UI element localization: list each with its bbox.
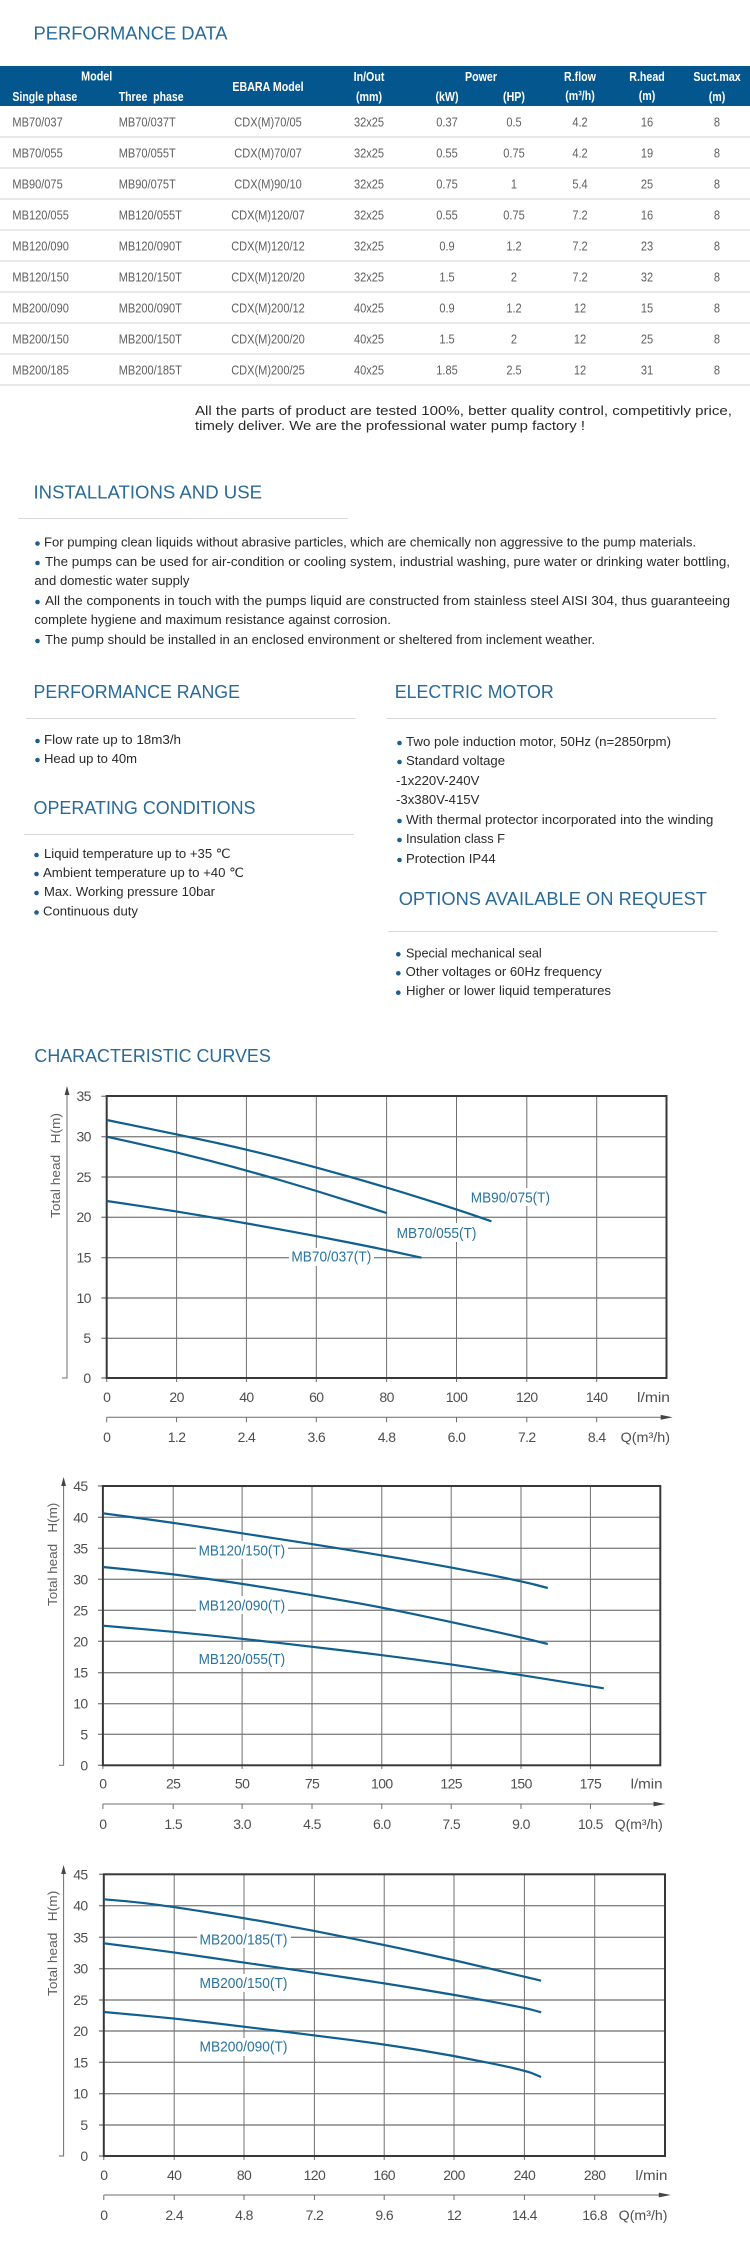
chart: MB120 curves <box>46 1477 666 1832</box>
column: suction max: 8 <box>714 177 720 192</box>
flow axis l/min values: 40 <box>239 1389 254 1405</box>
column: in/out: 32x25 <box>354 270 384 285</box>
column: in/out: 40x25 <box>354 363 384 378</box>
column: single phase: MB120/090 <box>12 239 69 254</box>
flow axis l/min values: 120 <box>304 2167 326 2183</box>
list: options available <box>396 945 612 998</box>
column: three phase: MB90/075T <box>119 177 176 192</box>
column: in/out <box>354 115 384 378</box>
column: suction max: 8 <box>714 208 720 223</box>
column: single phase: MB200/150 <box>12 332 69 347</box>
flow axis m3/h values: Q(m³/h) <box>619 2207 668 2223</box>
column: suction max: 8 <box>714 363 720 378</box>
curve label: MB120/055(T): MB120/055(T) <box>199 1651 285 1668</box>
column: power kW: 1.85 <box>436 363 458 378</box>
y axis arrow <box>59 1477 66 1765</box>
column: rated head: 16 <box>641 115 653 130</box>
list: installations and use: complete hygiene and maximum resistance against corrosion. <box>34 612 391 627</box>
list: electric motor: -3x380V-415V <box>396 792 480 807</box>
flow axis m3/h values: 4.8 <box>378 1429 396 1445</box>
flow axis m3/h values: 7.5 <box>442 1816 461 1832</box>
column: power kW: 0.55 <box>436 146 458 161</box>
curve: MB120/150 <box>103 1513 548 1588</box>
table header band: Model <box>81 69 112 84</box>
y axis values: 35 <box>77 1088 92 1104</box>
curve label: MB120/090(T): MB120/090(T) <box>199 1597 285 1614</box>
flow axis m3/h values: 4.8 <box>235 2207 254 2223</box>
flow axis l/min values: 280 <box>584 2167 606 2183</box>
column: power HP: 0.75 <box>503 146 525 161</box>
column: rated flow: 5.4 <box>572 177 588 192</box>
y axis values: 45 <box>73 1866 88 1882</box>
list: options available: Special mechanical seal <box>406 945 542 960</box>
column: single phase: MB200/185 <box>12 363 69 378</box>
text block: quality statement: timely deliver. We are the professional water pump factory ! <box>195 418 585 433</box>
curve: MB200/185 <box>104 1899 541 1981</box>
heading: installations and use: INSTALLATIONS AND USE <box>34 482 262 502</box>
y axis values: 15 <box>73 1665 88 1681</box>
flow axis l/min values: 40 <box>167 2167 182 2183</box>
y axis values <box>73 1478 88 1773</box>
flow axis m3/h values: 6.0 <box>448 1429 466 1445</box>
column: suction max: 8 <box>714 146 720 161</box>
y axis values: 10 <box>77 1290 92 1306</box>
column: rated head: 16 <box>641 208 653 223</box>
y axis values: 20 <box>73 2023 88 2039</box>
flow axis l/min values: 120 <box>516 1389 538 1405</box>
flow axis l/min values: 200 <box>443 2167 466 2183</box>
flow axis l/min values: 240 <box>514 2167 536 2183</box>
flow axis l/min values: 75 <box>305 1776 320 1792</box>
y axis values: 30 <box>73 1961 88 1977</box>
column: EBARA model: CDX(M)200/20 <box>231 332 305 347</box>
column: single phase <box>12 115 69 378</box>
column: single phase: MB200/090 <box>12 301 69 316</box>
list: operating conditions: Liquid temperature up to +35 ℃ <box>44 846 230 861</box>
table header band: (m³/h) <box>565 88 595 103</box>
column: single phase: MB70/055 <box>12 146 63 161</box>
table: performance data <box>0 66 750 386</box>
column: power HP: 2 <box>511 332 517 347</box>
flow axis l/min values <box>99 1776 663 1792</box>
list: operating conditions: Max. Working pressure 10bar <box>44 884 216 899</box>
list: options available: Higher or lower liquid temperatures <box>406 983 612 998</box>
flow axis m3/h values: 2.4 <box>238 1429 256 1445</box>
flow axis l/min values: 160 <box>373 2167 396 2183</box>
column: rated flow: 4.2 <box>572 146 588 161</box>
flow axis m3/h values: 4.5 <box>303 1816 322 1832</box>
plot border <box>103 1486 660 1765</box>
list: installations and use: All the components in touch with the pumps liquid are constructed from stainless steel AISI 304, thus guaranteeing <box>45 593 730 608</box>
column: power HP: 2 <box>511 270 517 285</box>
flow axis m3/h values: 0 <box>100 2207 108 2223</box>
column: power HP: 1.2 <box>506 239 522 254</box>
column: three phase: MB70/055T <box>119 146 176 161</box>
column: rated flow: 7.2 <box>572 270 588 285</box>
heading: performance data: PERFORMANCE DATA <box>34 22 228 44</box>
table header band: R.head <box>629 69 665 84</box>
flow axis m3/h values: 16.8 <box>582 2207 608 2223</box>
list: installations and use: For pumping clean liquids without abrasive particles, which are chemically non aggressive to the pump materials. <box>44 535 696 550</box>
column: power kW: 0.55 <box>436 208 458 223</box>
y axis values: 10 <box>73 1696 88 1712</box>
table header band: R.flow <box>564 69 597 84</box>
flow axis m3/h values: Q(m³/h) <box>621 1429 670 1445</box>
flow axis m3/h values <box>100 2207 668 2223</box>
table header band: (mm) <box>356 89 382 104</box>
list: electric motor: Standard voltage <box>406 753 505 768</box>
chart: MB200 curves <box>46 1865 671 2223</box>
y axis values: 5 <box>80 2117 88 2133</box>
column: rated head: 25 <box>641 177 653 192</box>
flow axis m3/h values: 14.4 <box>512 2207 538 2223</box>
y axis values: 25 <box>73 1602 88 1618</box>
y axis title: Total head H(m) <box>49 1113 63 1218</box>
flow axis l/min values: l/min <box>635 2167 667 2183</box>
column: three phase: MB200/185T <box>119 363 182 378</box>
column: power kW: 0.37 <box>436 115 458 130</box>
flow axis l/min values: 0 <box>99 1776 107 1792</box>
column: single phase: MB120/150 <box>12 270 69 285</box>
y axis values: 15 <box>73 2054 88 2070</box>
column: suction max: 8 <box>714 270 720 285</box>
flow axis l/min values: 50 <box>235 1776 250 1792</box>
column: in/out: 40x25 <box>354 301 384 316</box>
column: rated flow <box>572 115 588 378</box>
curve: MB200/150 <box>104 1943 541 2012</box>
list: installations and use: and domestic water supply <box>34 573 190 588</box>
column: in/out: 40x25 <box>354 332 384 347</box>
table header band: Power <box>465 69 497 84</box>
column: three phase: MB120/090T <box>119 239 182 254</box>
column: EBARA model: CDX(M)120/07 <box>231 208 305 223</box>
flow axis l/min values: 125 <box>440 1776 463 1792</box>
flow axis l/min values <box>100 2167 667 2183</box>
flow axis l/min values: 140 <box>586 1389 608 1405</box>
column: power HP: 1 <box>511 177 517 192</box>
list: performance range <box>35 732 181 766</box>
y axis values: 0 <box>80 2148 88 2164</box>
curve label: MB90/075(T): MB90/075(T) <box>471 1190 550 1206</box>
y axis values: 30 <box>73 1571 88 1587</box>
flow axis l/min values <box>103 1389 670 1405</box>
list: electric motor: -1x220V-240V <box>396 773 480 788</box>
list: electric motor: With thermal protector incorporated into the winding <box>406 812 713 827</box>
flow axis m3/h values: 7.2 <box>306 2207 324 2223</box>
column: EBARA model: CDX(M)90/10 <box>234 177 302 192</box>
table header band <box>0 66 750 106</box>
table header band: (HP) <box>503 89 525 104</box>
y axis values: 40 <box>73 1898 88 1914</box>
flow axis m3/h values: 1.2 <box>168 1429 186 1445</box>
curve: MB70/055 <box>107 1137 387 1213</box>
flow axis m3/h values: Q(m³/h) <box>615 1816 663 1832</box>
list: electric motor: Protection IP44 <box>406 851 496 866</box>
column: three phase: MB120/055T <box>119 208 182 223</box>
column: rated head <box>641 115 653 378</box>
column: EBARA model: CDX(M)120/12 <box>231 239 305 254</box>
y axis values: 35 <box>73 1540 88 1556</box>
column: rated flow: 7.2 <box>572 239 588 254</box>
flow axis arrow <box>103 1802 665 1809</box>
column: power kW <box>436 115 458 378</box>
flow axis m3/h values: 0 <box>103 1429 111 1445</box>
table header band: In/Out <box>354 69 384 84</box>
y axis values: 0 <box>80 1757 88 1773</box>
heading: options available on request: OPTIONS AVAILABLE ON REQUEST <box>399 888 707 909</box>
list: operating conditions: Ambient temperature up to +40 ℃ <box>43 865 244 880</box>
heading: performance range: PERFORMANCE RANGE <box>34 681 240 702</box>
list: electric motor <box>396 734 713 866</box>
list: performance range: Head up to 40m <box>44 751 137 766</box>
column: single phase: MB120/055 <box>12 208 69 223</box>
flow axis m3/h values <box>99 1816 663 1832</box>
curve label: MB70/037(T): MB70/037(T) <box>291 1248 371 1266</box>
text block: quality statement <box>195 403 732 433</box>
y axis values <box>77 1088 92 1386</box>
flow axis l/min values: 80 <box>379 1389 395 1405</box>
list: operating conditions <box>34 846 244 919</box>
column: power kW: 1.5 <box>439 270 455 285</box>
flow axis l/min values: 0 <box>103 1389 111 1405</box>
flow axis l/min values: 175 <box>580 1776 602 1792</box>
flow axis m3/h values: 8.4 <box>588 1429 606 1445</box>
flow axis m3/h values: 12 <box>447 2207 462 2223</box>
list: options available: Other voltages or 60Hz frequency <box>406 964 602 979</box>
curve label: MB200/090(T): MB200/090(T) <box>200 2039 288 2056</box>
list: operating conditions: Continuous duty <box>43 904 139 919</box>
column: single phase: MB70/037 <box>12 115 63 130</box>
column: EBARA model <box>231 115 305 378</box>
heading: characteristic curves: CHARACTERISTIC CURVES <box>34 1045 271 1066</box>
flow axis l/min values: l/min <box>637 1389 670 1405</box>
list: installations and use <box>34 535 730 647</box>
flow axis l/min values: 20 <box>169 1389 185 1405</box>
curve: MB90/075 <box>107 1120 491 1221</box>
curve label: MB200/150(T): MB200/150(T) <box>200 1975 288 1992</box>
y axis values: 25 <box>77 1169 92 1185</box>
table header band: (m) <box>709 89 725 104</box>
column: rated head: 32 <box>641 270 653 285</box>
column: suction max: 8 <box>714 115 720 130</box>
column: rated flow: 12 <box>574 301 586 316</box>
plot border <box>107 1096 666 1378</box>
column: power kW: 1.5 <box>439 332 455 347</box>
column: in/out: 32x25 <box>354 115 384 130</box>
curve: MB120/090 <box>103 1567 548 1644</box>
y axis values: 20 <box>77 1209 92 1225</box>
column: EBARA model: CDX(M)120/20 <box>231 270 305 285</box>
flow axis arrow <box>107 1415 673 1422</box>
column: three phase: MB70/037T <box>119 115 176 130</box>
table header band: (kW) <box>435 89 459 104</box>
flow axis m3/h values: 3.0 <box>233 1816 252 1832</box>
y axis values: 25 <box>73 1992 88 2008</box>
flow axis l/min values: 80 <box>237 2167 252 2183</box>
column: in/out: 32x25 <box>354 239 384 254</box>
column: in/out: 32x25 <box>354 177 384 192</box>
column: power HP: 0.5 <box>506 115 522 130</box>
table header band: Single phase <box>12 89 78 104</box>
flow axis l/min values: 25 <box>166 1776 181 1792</box>
column: power HP: 0.75 <box>503 208 525 223</box>
flow axis m3/h values: 2.4 <box>165 2207 184 2223</box>
flow axis m3/h values <box>103 1429 670 1445</box>
text block: quality statement: All the parts of product are tested 100%, better quality control, competitivly price, <box>195 403 732 418</box>
column: power kW: 0.75 <box>436 177 458 192</box>
y axis values: 5 <box>80 1726 88 1742</box>
column: EBARA model: CDX(M)200/12 <box>231 301 305 316</box>
y axis values: 10 <box>73 2086 88 2102</box>
flow axis l/min values: 150 <box>510 1776 533 1792</box>
column: rated head: 31 <box>641 363 653 378</box>
column: rated flow: 7.2 <box>572 208 588 223</box>
column: three phase: MB120/150T <box>119 270 182 285</box>
flow axis l/min values: 100 <box>371 1776 393 1792</box>
y axis values <box>73 1866 88 2164</box>
curve label: MB200/185(T): MB200/185(T) <box>200 1931 288 1948</box>
flow axis arrow <box>104 2193 671 2200</box>
y axis arrow <box>59 1865 66 2156</box>
column: EBARA model: CDX(M)200/25 <box>231 363 305 378</box>
column: three phase: MB200/150T <box>119 332 182 347</box>
table header band: EBARA Model <box>232 79 304 94</box>
column: power HP: 1.2 <box>506 301 522 316</box>
flow axis m3/h values: 10.5 <box>578 1816 604 1832</box>
plot border <box>104 1874 665 2156</box>
flow axis l/min values: l/min <box>631 1776 663 1792</box>
table header band: (m) <box>639 88 655 103</box>
y axis values: 15 <box>77 1250 92 1266</box>
y axis values: 35 <box>73 1929 88 1945</box>
y axis values: 5 <box>83 1330 91 1346</box>
curve: MB120/055 <box>103 1626 604 1688</box>
column: rated head: 25 <box>641 332 653 347</box>
flow axis m3/h values: 3.6 <box>307 1429 326 1445</box>
column: rated flow: 12 <box>574 332 586 347</box>
curve label: MB120/150(T): MB120/150(T) <box>199 1542 285 1559</box>
column: power kW: 0.9 <box>439 301 455 316</box>
column: rated head: 15 <box>641 301 653 316</box>
heading: electric motor: ELECTRIC MOTOR <box>395 681 554 702</box>
column: EBARA model: CDX(M)70/05 <box>234 115 302 130</box>
column: EBARA model: CDX(M)70/07 <box>234 146 302 161</box>
list: electric motor: Two pole induction motor, 50Hz (n=2850rpm) <box>406 734 671 749</box>
y axis title: Total head H(m) <box>46 1503 60 1606</box>
flow axis l/min values: 60 <box>309 1389 324 1405</box>
column: rated flow: 12 <box>574 363 586 378</box>
flow axis m3/h values: 9.0 <box>512 1816 531 1832</box>
flow axis m3/h values: 6.0 <box>373 1816 391 1832</box>
column: suction max: 8 <box>714 301 720 316</box>
curve label: MB70/055(T): MB70/055(T) <box>397 1225 476 1242</box>
chart: MB70 / MB90 curves <box>49 1086 673 1445</box>
list: performance range: Flow rate up to 18m3/h <box>44 732 181 747</box>
y axis title: Total head H(m) <box>46 1891 60 1996</box>
column: suction max: 8 <box>714 332 720 347</box>
list: installations and use: The pumps can be used for air-condition or cooling system, industrial washing, pure water or drinking water bottling, <box>45 554 730 569</box>
y axis values: 30 <box>77 1128 92 1144</box>
flow axis m3/h values: 1.5 <box>164 1816 183 1832</box>
column: three phase <box>119 115 182 378</box>
flow axis m3/h values: 7.2 <box>518 1429 536 1445</box>
y axis values: 40 <box>73 1509 88 1525</box>
column: single phase: MB90/075 <box>12 177 63 192</box>
flow axis l/min values: 0 <box>100 2167 108 2183</box>
curve: MB200/090 <box>104 2012 541 2077</box>
y axis values: 0 <box>83 1370 91 1386</box>
flow axis m3/h values: 0 <box>99 1816 107 1832</box>
flow axis m3/h values: 9.6 <box>375 2207 394 2223</box>
y axis values: 45 <box>73 1478 88 1494</box>
column: in/out: 32x25 <box>354 146 384 161</box>
column: power kW: 0.9 <box>439 239 455 254</box>
y axis values: 20 <box>73 1633 88 1649</box>
column: suction max: 8 <box>714 239 720 254</box>
flow axis l/min values: 100 <box>446 1389 468 1405</box>
column: power HP <box>503 115 525 378</box>
table header band: Suct.max <box>693 69 741 84</box>
column: rated flow: 4.2 <box>572 115 588 130</box>
column: rated head: 19 <box>641 146 653 161</box>
curve: MB70/037 <box>107 1201 421 1258</box>
column: three phase: MB200/090T <box>119 301 182 316</box>
heading: operating conditions: OPERATING CONDITIONS <box>34 797 256 818</box>
column: suction max <box>714 115 720 378</box>
column: rated head: 23 <box>641 239 653 254</box>
table header band: Three phase <box>119 89 184 104</box>
list: electric motor: Insulation class F <box>406 831 505 846</box>
y axis arrow <box>62 1086 69 1378</box>
column: in/out: 32x25 <box>354 208 384 223</box>
list: installations and use: The pump should be installed in an enclosed environment or sheltered from inclement weather. <box>45 632 595 647</box>
column: power HP: 2.5 <box>506 363 522 378</box>
